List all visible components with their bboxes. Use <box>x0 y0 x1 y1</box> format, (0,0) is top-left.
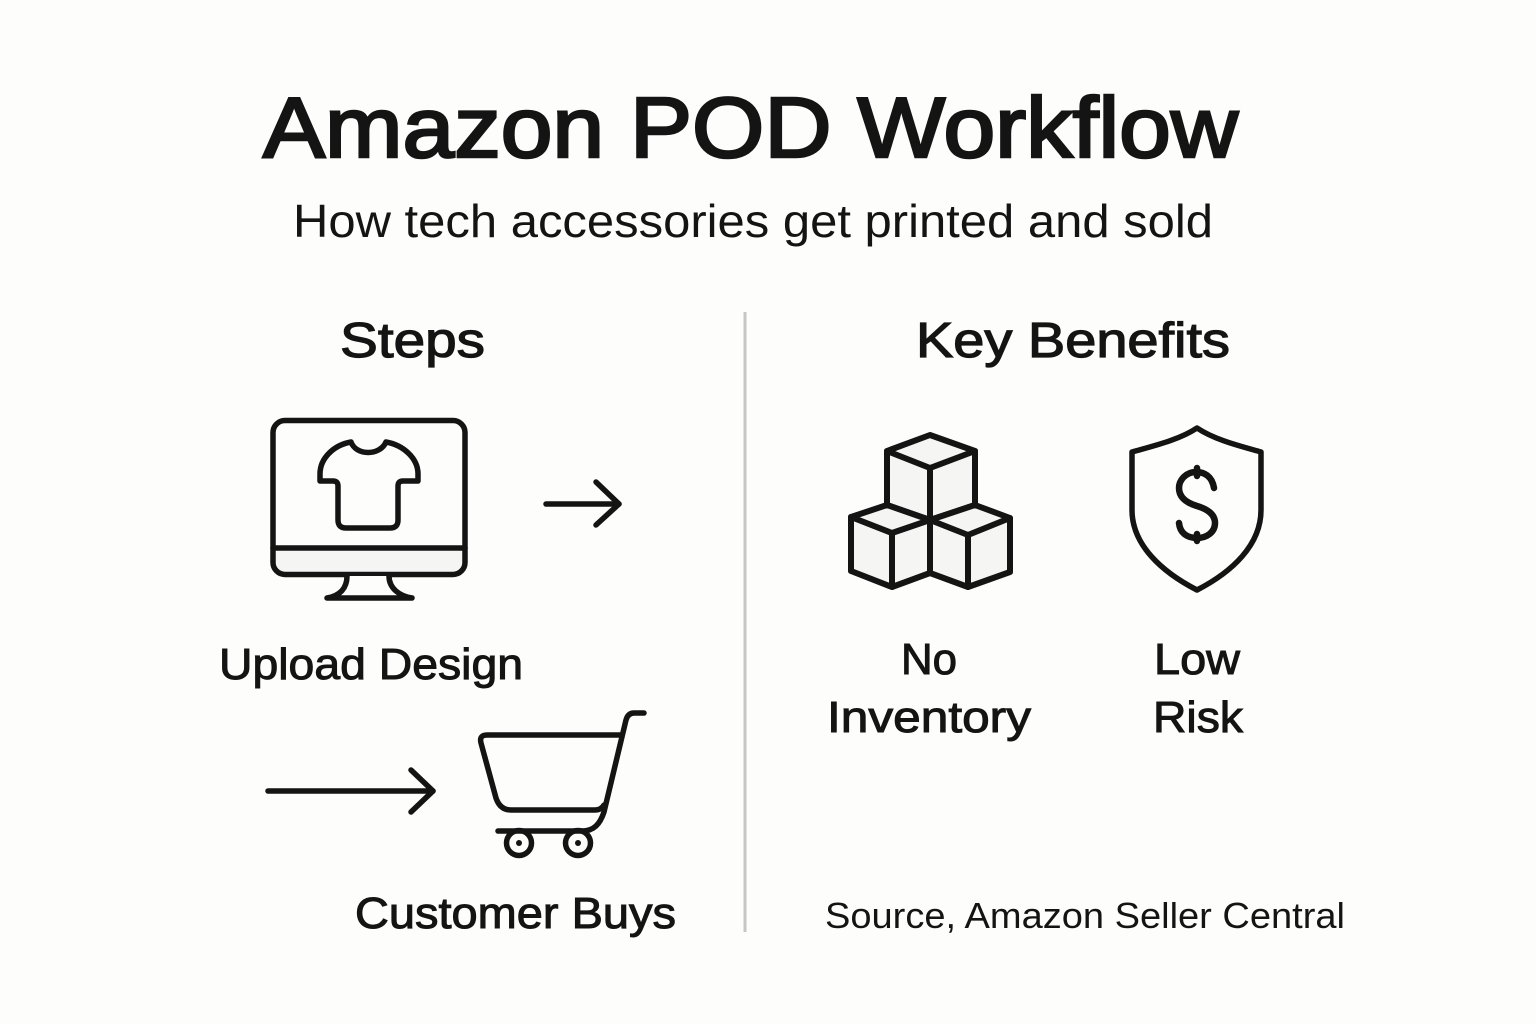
subtitle: How tech accessories get printed and sold <box>293 195 1213 247</box>
label: Upload Design: Upload Design <box>219 640 523 689</box>
label: Low Risk <box>1153 635 1244 742</box>
label: Low Risk: Low <box>1154 635 1240 684</box>
label: No Inventory <box>827 635 1031 742</box>
heading: Key Benefits: Key Benefits <box>916 314 1230 368</box>
icon: shopping cart <box>481 713 644 856</box>
icon: monitor with t-shirt <box>273 420 465 598</box>
icon: shield with dollar sign <box>1132 428 1261 590</box>
heading: Steps: Steps <box>340 314 485 368</box>
vertical divider <box>744 312 746 932</box>
source note: Source, Amazon Seller Central <box>825 895 1345 936</box>
label: Low Risk: Risk <box>1153 693 1244 742</box>
icon: stacked boxes <box>851 435 1010 587</box>
label: No Inventory: No <box>901 635 957 684</box>
arrow: to customer <box>268 770 433 812</box>
label: No Inventory: Inventory <box>827 693 1031 742</box>
arrow: upload to next step <box>546 482 619 525</box>
title: Amazon POD Workflow <box>263 81 1239 176</box>
label: Customer Buys: Customer Buys <box>355 889 676 938</box>
